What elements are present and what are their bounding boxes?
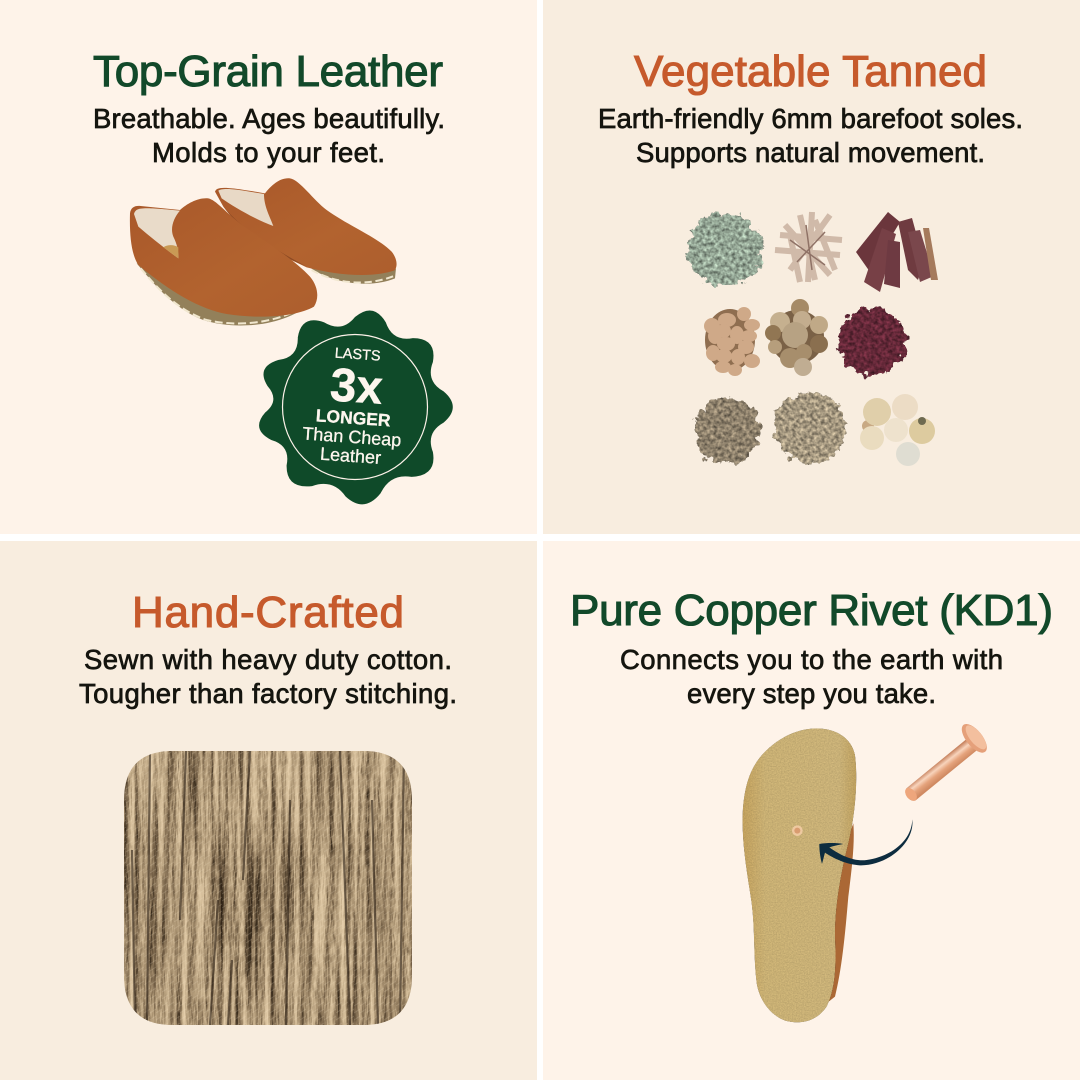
image: pair of leather shoes [130, 178, 397, 325]
badge: lasts 3x longer: Leather [319, 444, 382, 468]
panel: vegetable tanned [543, 0, 1080, 534]
text: top-grain description [93, 103, 445, 168]
text: hand-crafted description [79, 644, 457, 709]
text: copper rivet description: every step you take. [687, 678, 936, 709]
badge: lasts 3x longer: LONGER [315, 405, 392, 431]
text: copper rivet description: Connects you to the earth with [620, 644, 1003, 675]
image: nine tanning ingredients [688, 212, 938, 466]
heading: pure copper rivet: Pure Copper Rivet (KD1) [570, 586, 1053, 635]
text: vegetable tanned description: Earth-friendly 6mm barefoot soles. [598, 103, 1023, 134]
text: hand-crafted description: Sewn with heavy duty cotton. [84, 644, 452, 675]
image: shoe sole [743, 728, 856, 1022]
panel: hand-crafted [0, 541, 537, 1080]
text: vegetable tanned description [598, 103, 1023, 168]
icon: copper rivet [903, 720, 991, 803]
text: top-grain description: Breathable. Ages beautifully. [93, 103, 445, 134]
badge: lasts 3x longer: Than Cheap [302, 423, 402, 450]
badge: lasts 3x longer: LASTS [334, 345, 381, 365]
heading: top-grain leather: Top-Grain Leather [93, 47, 443, 96]
badge: lasts 3x longer [259, 310, 453, 504]
text: copper rivet description [620, 644, 1003, 709]
text: vegetable tanned description: Supports natural movement. [636, 137, 985, 168]
text: hand-crafted description: Tougher than factory stitching. [79, 678, 457, 709]
arrow: rivet to sole [819, 819, 912, 865]
badge: lasts 3x longer: 3x [329, 357, 384, 414]
image: cotton thread swatch [124, 751, 412, 1025]
heading: hand-crafted: Hand-Crafted [132, 588, 404, 637]
panel: pure copper rivet [543, 541, 1080, 1080]
text: top-grain description: Molds to your feet. [152, 137, 385, 168]
heading: vegetable tanned: Vegetable Tanned [634, 47, 987, 96]
panel: top-grain leather [0, 0, 537, 534]
